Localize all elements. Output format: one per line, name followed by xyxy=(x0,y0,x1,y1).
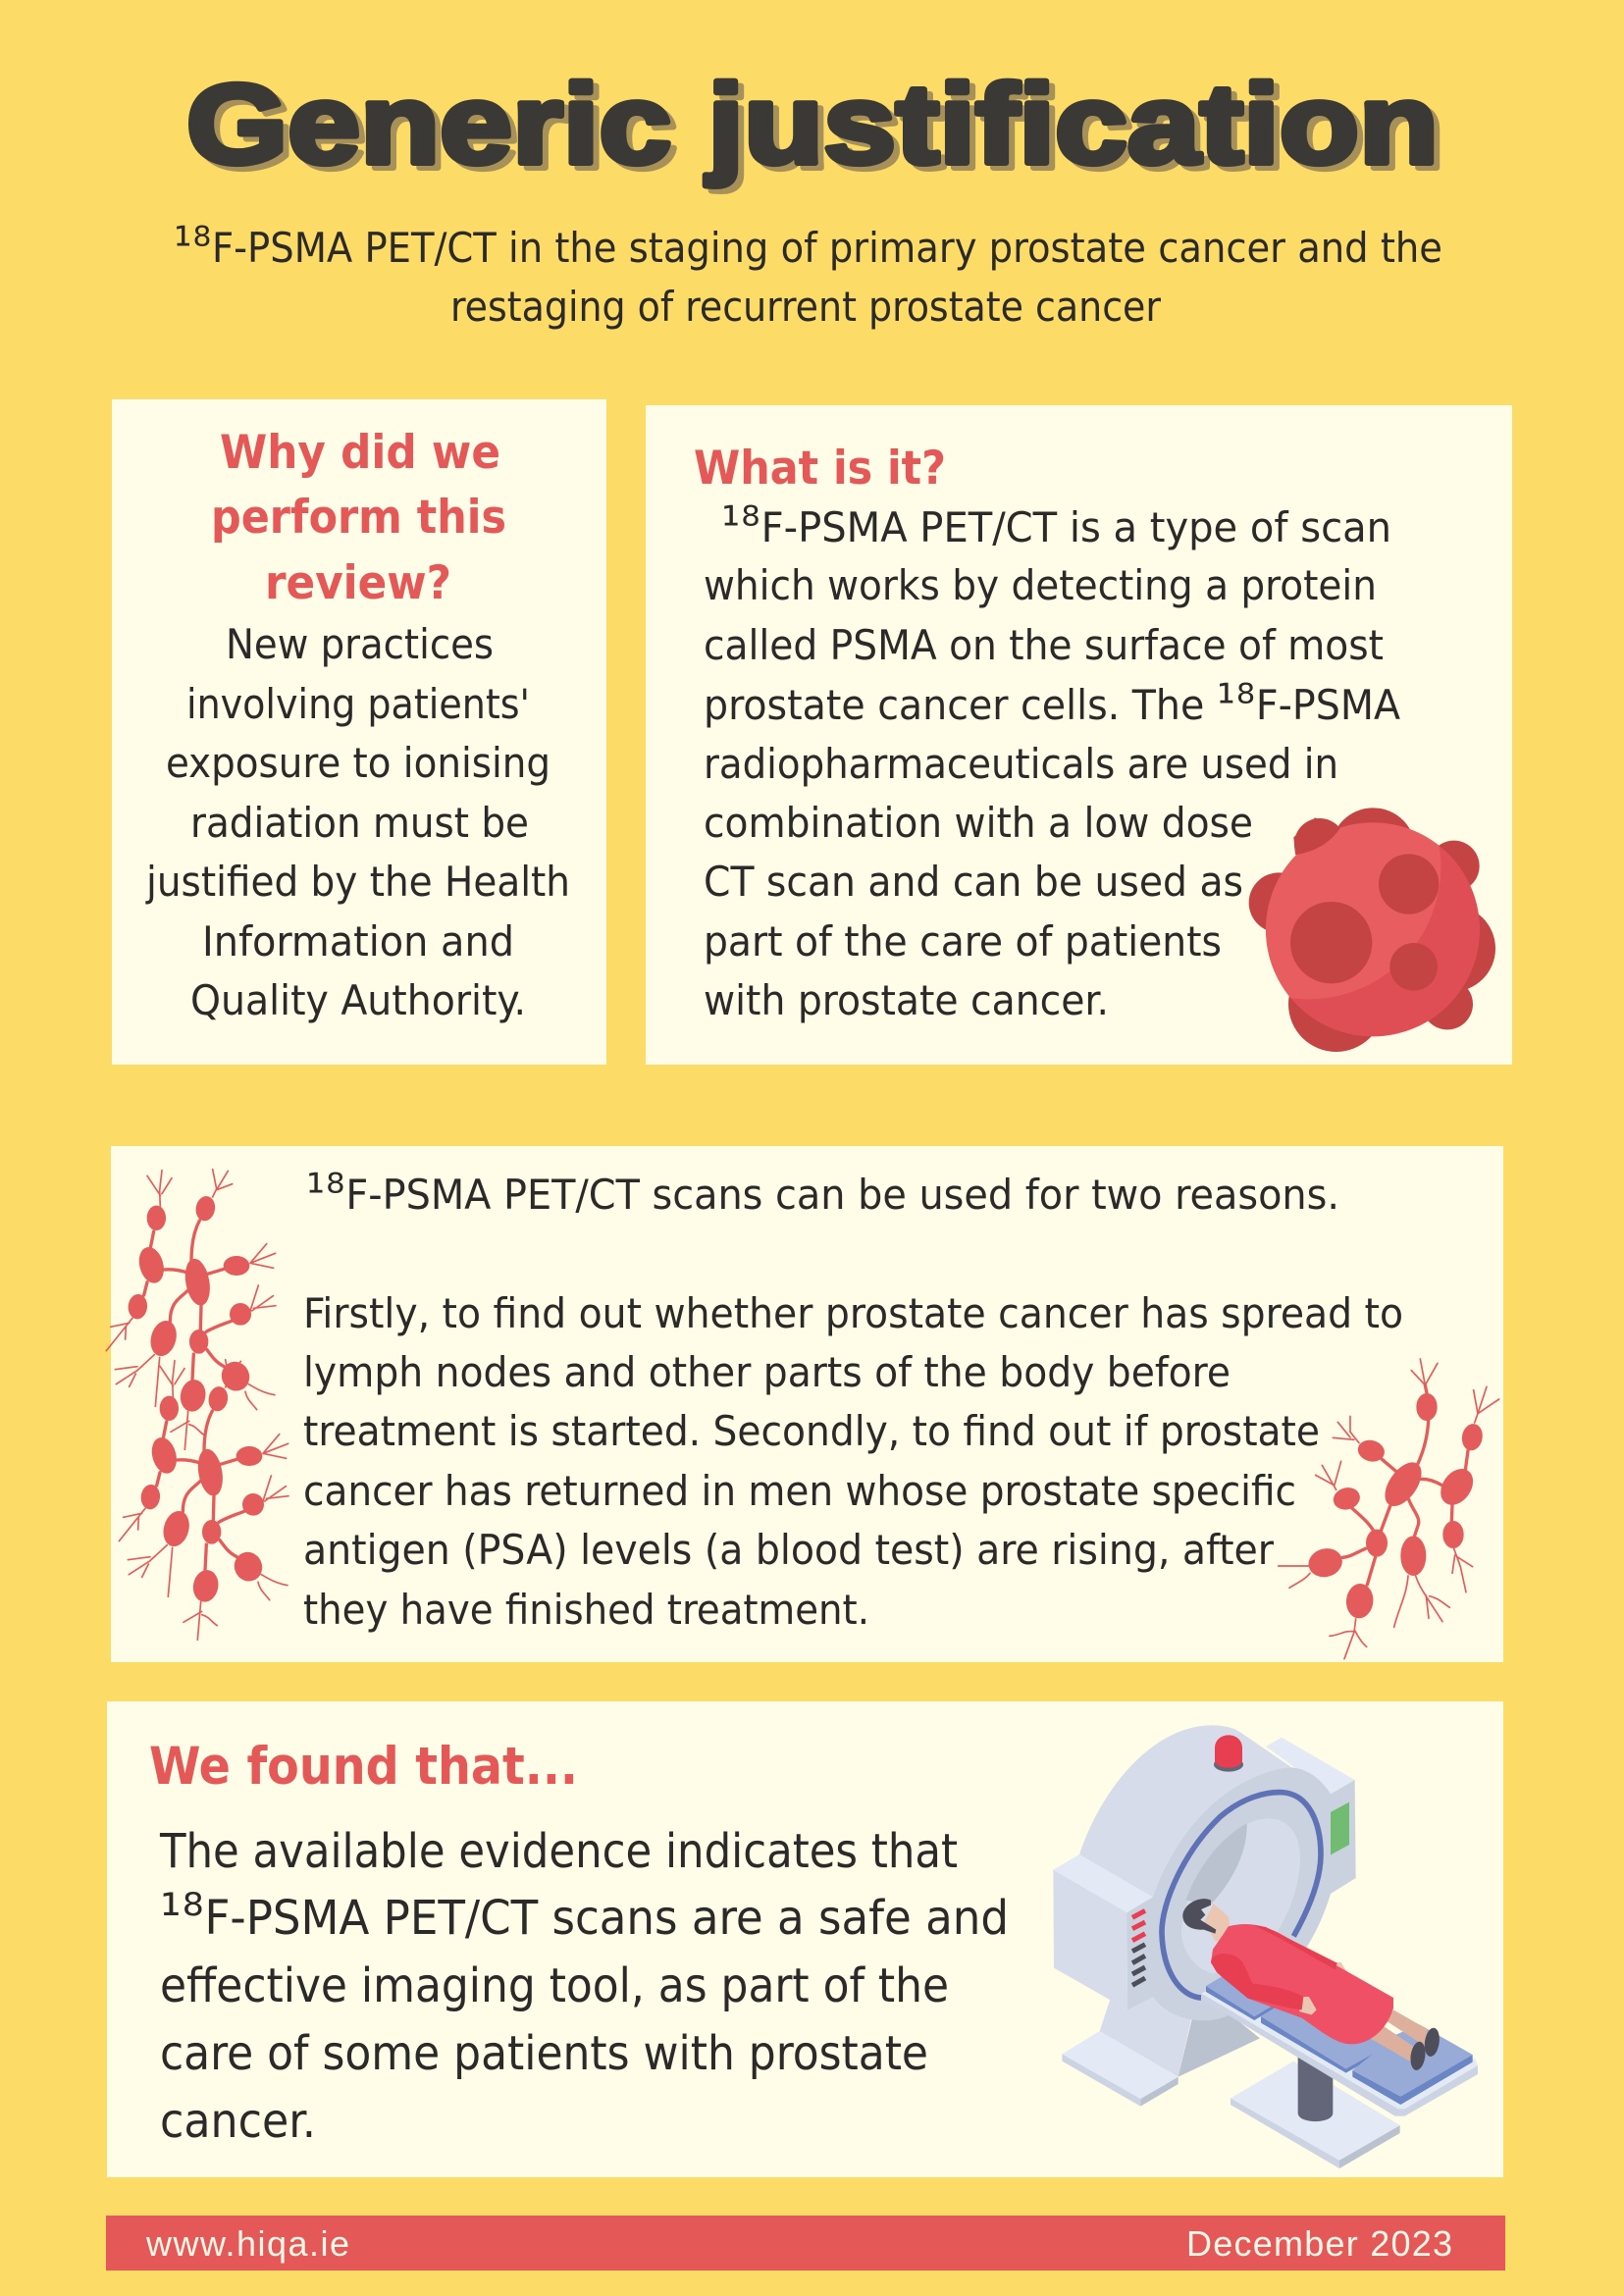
text block: review rationale: New practices xyxy=(226,620,494,668)
text block: scan description xyxy=(704,496,1400,1024)
text block: scan description: called PSMA on the surface of most xyxy=(704,621,1384,669)
text block: review rationale: Information and xyxy=(202,917,514,965)
text block: scan description: part of the care of patients xyxy=(704,917,1222,965)
text block: findings xyxy=(159,1824,1009,2149)
text block: two reasons: lymph nodes and other parts of the body before xyxy=(303,1348,1231,1396)
text block: scan description: which works by detecting a protein xyxy=(704,561,1377,609)
icon: PET/CT scanner with patient xyxy=(1053,1725,1478,2168)
subtitle: restaging of recurrent prostate cancer xyxy=(450,283,1161,331)
text block: two reasons: they have finished treatment. xyxy=(303,1586,869,1634)
heading: why did we perform this review: perform this xyxy=(211,491,506,545)
icon: cancer cell xyxy=(1248,808,1495,1052)
text block: review rationale: Quality Authority. xyxy=(190,976,526,1024)
text block: findings: effective imaging tool, as part of the xyxy=(160,1958,949,2013)
text block: scan description: prostate cancer cells. The ¹⁸F-PSMA xyxy=(704,673,1400,731)
text block: scan description: with prostate cancer. xyxy=(704,976,1109,1024)
footer website: www.hiqa.ie xyxy=(145,2223,349,2264)
footer date: December 2023 xyxy=(1186,2223,1452,2264)
text block: two reasons: cancer has returned in men whose prostate specific xyxy=(303,1467,1296,1515)
footer bar xyxy=(106,2216,1505,2270)
subtitle: ¹⁸F-PSMA PET/CT in the staging of primary prostate cancer and the xyxy=(174,216,1442,274)
text block: review rationale: radiation must be xyxy=(190,799,529,847)
text block: two reasons xyxy=(303,1163,1403,1634)
patient table xyxy=(1201,1974,1478,2168)
icon: lymph nodes left xyxy=(106,1170,288,1640)
patient xyxy=(1182,1899,1441,2071)
heading: why did we perform this review: review? xyxy=(265,556,451,610)
title: Generic justification xyxy=(186,62,1439,187)
panel: why did we perform this review xyxy=(112,399,606,1065)
text block: two reasons: treatment is started. Secondly, to find out if prostate xyxy=(303,1407,1320,1455)
text block: scan description: CT scan and can be used as xyxy=(704,858,1243,906)
heading: what is it: What is it? xyxy=(694,442,946,496)
text block: two reasons: ¹⁸F-PSMA PET/CT scans can be used for two reasons. xyxy=(306,1163,1339,1221)
text block: scan description: combination with a low dose xyxy=(704,799,1253,847)
panel: what is it xyxy=(646,405,1512,1065)
text block: findings: care of some patients with prostate xyxy=(160,2026,928,2081)
text block: review rationale: exposure to ionising xyxy=(166,739,550,787)
text block: scan description: ¹⁸F-PSMA PET/CT is a type of scan xyxy=(721,496,1391,553)
scanner base and stand xyxy=(1062,1989,1260,2107)
text block: findings: The available evidence indicates that xyxy=(159,1824,958,1879)
heading: why did we perform this review: Why did we xyxy=(220,426,500,480)
panel: two reasons for scans xyxy=(106,1146,1503,1662)
text block: review rationale xyxy=(145,620,570,1024)
text block: findings: ¹⁸F-PSMA PET/CT scans are a safe and xyxy=(160,1882,1009,1948)
heading: we found that: We found that... xyxy=(149,1737,578,1797)
text block: two reasons: Firstly, to find out whether prostate cancer has spread to xyxy=(303,1289,1403,1337)
text block: scan description: radiopharmaceuticals are used in xyxy=(704,740,1338,788)
text block: findings: cancer. xyxy=(160,2094,316,2149)
scanner gantry xyxy=(1053,1725,1356,2020)
heading: why did we perform this review xyxy=(211,426,506,610)
icon: lymph nodes right xyxy=(1279,1359,1499,1659)
text block: two reasons: antigen (PSA) levels (a blood test) are rising, after xyxy=(303,1526,1274,1574)
panel: we found that xyxy=(107,1701,1503,2177)
text block: review rationale: involving patients' xyxy=(186,680,530,728)
subtitle xyxy=(174,216,1442,331)
text block: review rationale: justified by the Health xyxy=(145,858,570,906)
